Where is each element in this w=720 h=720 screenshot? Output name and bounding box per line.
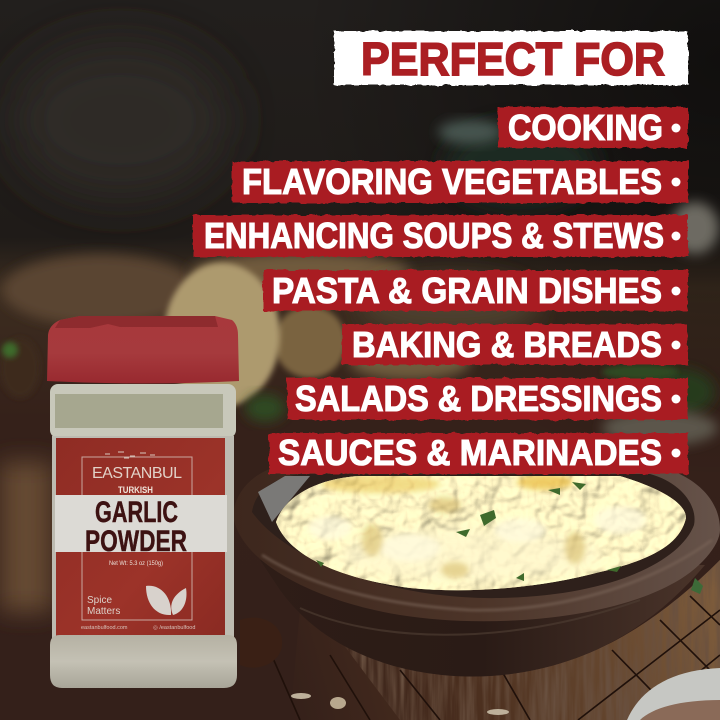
wooden table planks <box>240 560 720 720</box>
item: baking and breads: BAKING & BREADS <box>352 324 662 365</box>
item: enhancing soups and stews: ENHANCING SOUPS & STEWS <box>204 215 664 256</box>
product name: GARLIC <box>95 496 178 529</box>
heading: perfect for: PERFECT FOR <box>361 33 665 85</box>
cap <box>47 316 239 384</box>
product name <box>85 496 187 558</box>
tagline: Matters <box>87 606 120 617</box>
label: ◎ /eastanbulfood <box>153 625 195 631</box>
label <box>55 438 227 638</box>
item: sauces and marinades: SAUCES & MARINADES <box>278 432 662 473</box>
label: Net Wt: 5.3 oz (150g) <box>109 560 163 567</box>
blurred bread and potatoes <box>2 252 540 407</box>
item: salads and dressings: SALADS & DRESSINGS <box>295 378 662 419</box>
item: pasta and grain dishes: PASTA & GRAIN DISHES <box>272 270 662 311</box>
list: uses <box>193 107 688 474</box>
tagline: Spice <box>87 595 112 606</box>
icon: leaves <box>146 586 186 615</box>
item: cooking: COOKING <box>508 107 663 148</box>
jar body <box>50 384 236 640</box>
label: TURKISH <box>118 485 153 496</box>
jar base <box>50 635 237 688</box>
mashed potatoes <box>276 476 686 590</box>
brand: EASTANBUL <box>92 465 182 482</box>
product name: POWDER <box>85 525 187 558</box>
eggshell <box>627 668 720 720</box>
product jar <box>47 316 239 688</box>
label: eastanbulfood.com <box>81 625 128 631</box>
item: flavoring vegetables: FLAVORING VEGETABLES <box>242 161 662 202</box>
tagline <box>87 595 120 617</box>
bowl with mashed potatoes <box>233 462 720 676</box>
